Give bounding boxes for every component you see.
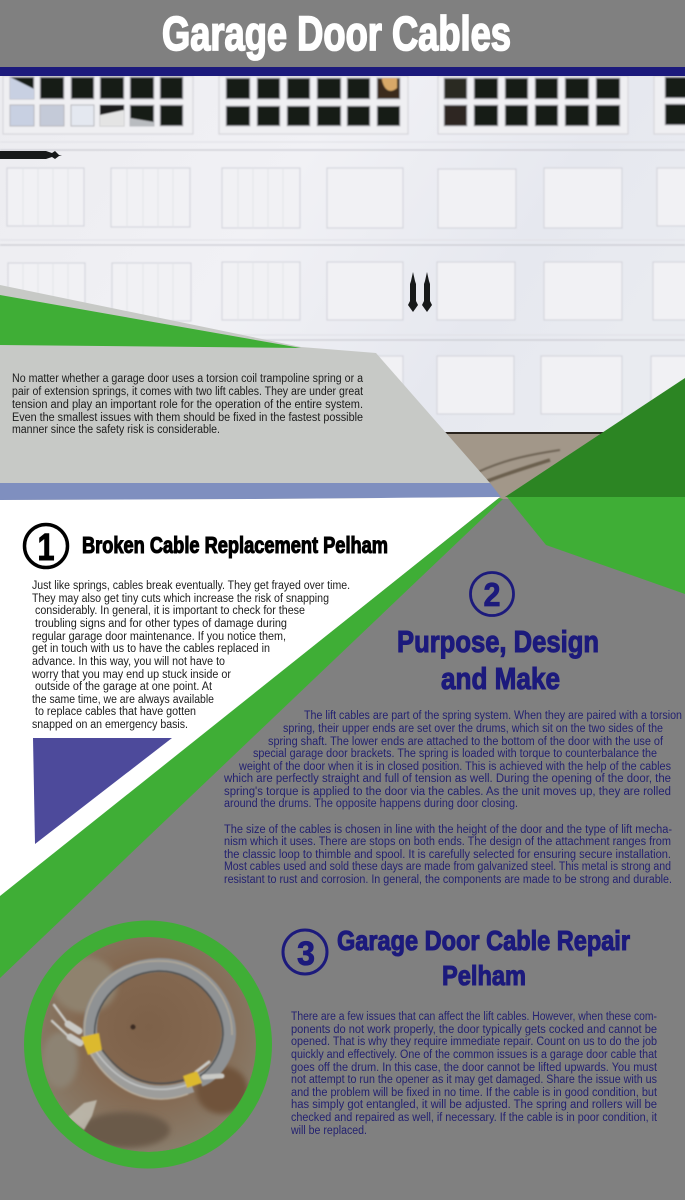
intro text: pair of extension springs, it comes with two lift cables. They are under great (12, 386, 364, 398)
text: section two, first paragraph: weight of the door when it is in closed position. This is achieved with the help of the cables (238, 761, 671, 773)
text: section three: quickly and effectively. One of the common issues is a garage door cable that (291, 1049, 658, 1061)
text: section three: and the problem will be fixed in no time. If the cable is in good condition, but (291, 1087, 658, 1099)
intro text: manner since the safety risk is considerable. (12, 424, 220, 436)
text: section three: goes off the drum. In this case, the door cannot be lifted upwards. You must (291, 1062, 658, 1074)
text: section two, second paragraph: the classic loop to thimble and spool. It is carefully selected for ensuring secure installation. (224, 849, 671, 861)
text: section two, second paragraph (224, 824, 672, 886)
heading: section three: Pelham (442, 960, 526, 991)
text: section one: outside of the garage at one point. At (35, 681, 213, 693)
purple triangle (33, 738, 172, 844)
dark green triangle (505, 378, 685, 497)
text: section one: considerably. In general, it is important to check for these (35, 605, 305, 617)
text: section one: advance. In this way, you will not have to (32, 656, 225, 668)
blue band (0, 483, 501, 500)
text: section two, first paragraph: spring shaft. The lower ends are attached to the bottom of the door with the use of (268, 736, 664, 748)
text: section one: regular garage door maintenance. If you notice them, (32, 631, 286, 643)
text: section two, first paragraph: around the drums. The opposite happens during door closing. (224, 798, 518, 810)
heading: section two: and Make (441, 661, 560, 696)
text: section one: They may also get tiny cuts which increase the risk of snapping (32, 593, 329, 605)
text: section three: checked and repaired as well, if necessary. If the cable is in poor condition, it (291, 1112, 658, 1124)
heading: section two: Purpose, Design (397, 624, 599, 659)
heading: section three: Garage Door Cable Repair (337, 925, 630, 956)
photo: concrete floor (430, 432, 685, 499)
intro text: Even the smallest issues with them should be fixed in the fastest possible (12, 412, 363, 424)
intro text: No matter whether a garage door uses a torsion coil trampoline spring or a (12, 373, 364, 385)
text: section three: will be replaced. (290, 1125, 367, 1137)
text: section two, first paragraph: spring's torque is applied to the door via the cables. As the unit moves up, they are rolled (224, 786, 671, 798)
text: section three: ponents do not work properly, the door typically gets cocked and cannot be (291, 1024, 657, 1036)
text: section one: troubling signs and for other types of damage during (35, 618, 287, 630)
text: section one: worry that you may end up stuck inside or (31, 669, 231, 681)
icon: door handles (408, 272, 432, 312)
text: section two, first paragraph (223, 710, 682, 810)
text: section two, first paragraph: spring, their upper ends are set over the drums, which sit on the two sides of the (283, 723, 663, 735)
text: section one: snapped on an emergency basis. (32, 719, 188, 731)
text: section three: has simply got entangled, it will be adjusted. The spring and rollers will be (291, 1099, 657, 1111)
text: section one: to replace cables that have gotten (35, 706, 196, 718)
icon: number 3 (283, 930, 327, 974)
heading: section two (397, 624, 599, 696)
navy stripe (0, 67, 685, 76)
text: section two, first paragraph: special garage door brackets. The spring is loaded with torque to counterbalance the (253, 748, 657, 760)
photo: garage door (0, 76, 685, 499)
green wedge (0, 295, 301, 348)
text: section two, second paragraph: The size of the cables is chosen in line with the height of the door and the type of lift mecha- (224, 824, 672, 836)
text: section three: opened. That is why they require immediate repair. Count on us to do the job (291, 1036, 657, 1048)
intro text: tension and play an important role for the operation of the entire system. (12, 399, 363, 411)
text: section three (290, 1011, 658, 1137)
green diagonal stripe (0, 498, 503, 978)
header band (0, 0, 685, 67)
icon: number 2: 2 (484, 576, 500, 613)
icon: number 3: 3 (297, 935, 315, 973)
panel: intro background (0, 285, 490, 483)
photo: coiled cables in green ring (24, 920, 272, 1168)
text: section one: Just like springs, cables break eventually. They get frayed over time. (32, 580, 350, 592)
text: section one (31, 580, 350, 731)
panel: white section one (0, 497, 500, 897)
icon: number 1 (24, 524, 68, 569)
heading: section one: Broken Cable Replacement Pelham (82, 532, 388, 558)
icon: door hinge strap (0, 151, 62, 159)
icon: number 2 (470, 572, 514, 616)
text: section one: get in touch with us to have the cables replaced in (32, 643, 270, 655)
heading: section three (337, 925, 630, 991)
title: Garage Door Cables (162, 8, 511, 61)
text: section one: the same time, we are always available (32, 694, 214, 706)
text: section three: not attempt to run the opener as it may get damaged. Share the issue with us (291, 1074, 657, 1086)
text: section two, first paragraph: which are perfectly straight and full of tension as well. During the opening of the door, the (223, 773, 671, 785)
text: section two, second paragraph: nism which it uses. There are stops on both ends. The design of the attachment ranges from (224, 836, 671, 848)
icon: number 1: 1 (38, 527, 54, 569)
light green shape (507, 497, 685, 594)
intro text (12, 373, 364, 436)
